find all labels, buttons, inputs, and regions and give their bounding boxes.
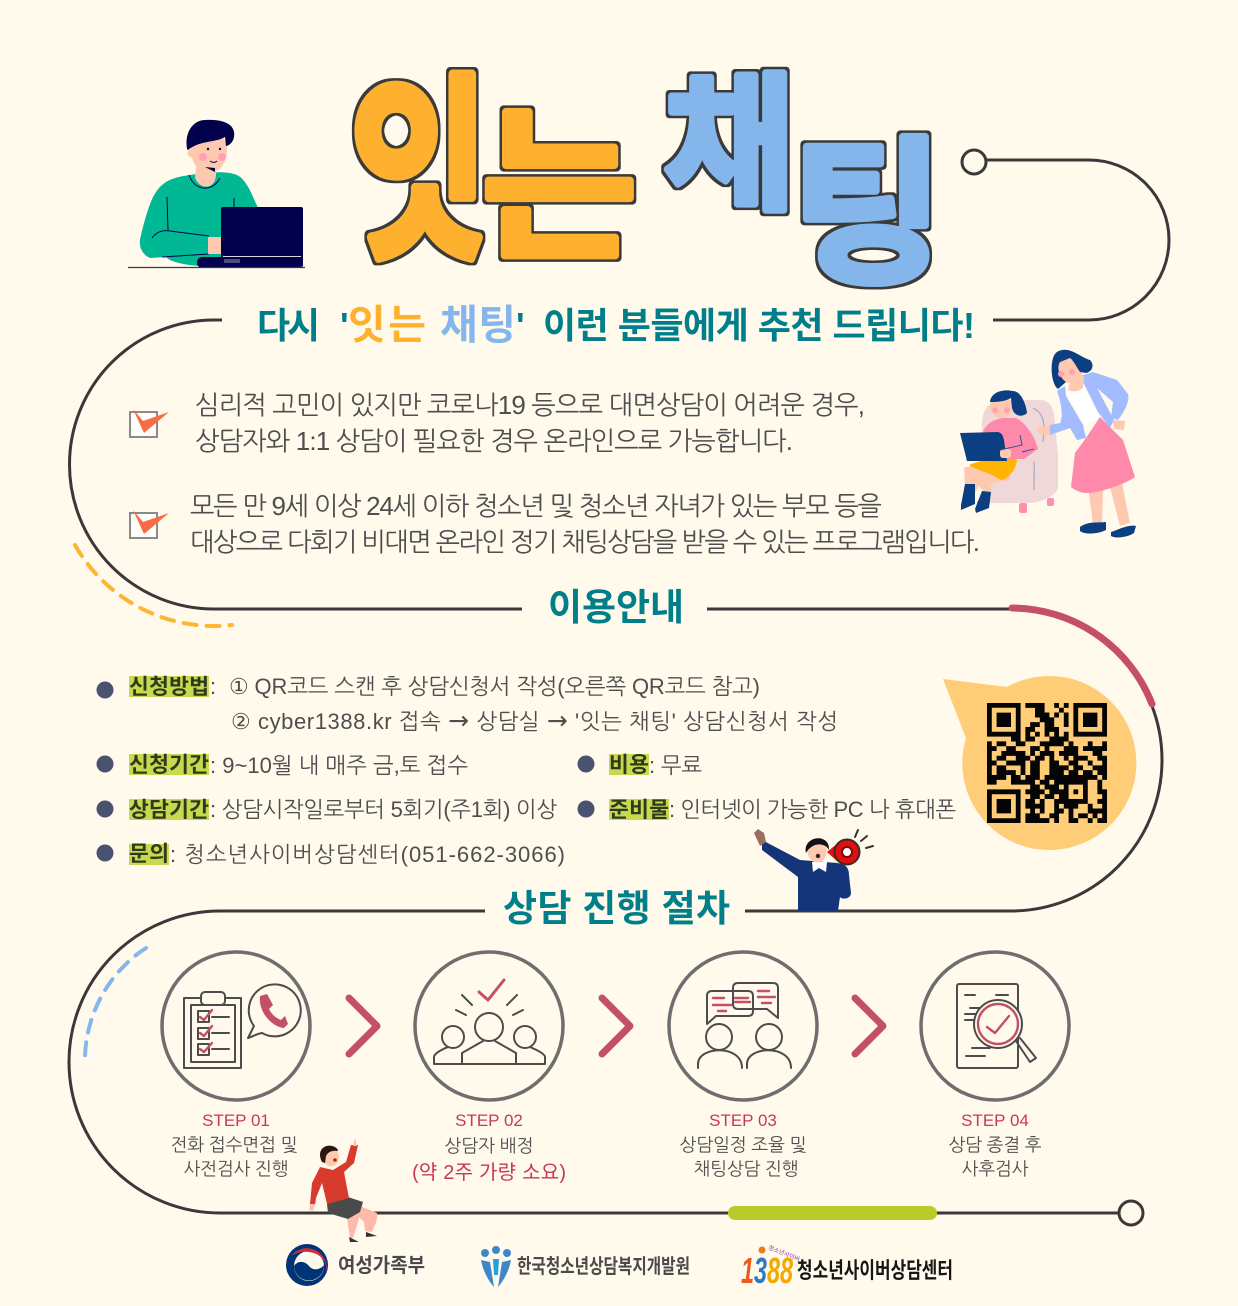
step 4: closing and follow-up [921,952,1069,1100]
step 4 label: 사후검사 [962,1159,1029,1179]
item: application period: : 9~10월 내 매주 금,토 접수 [210,753,468,778]
icon: two people chatting [698,983,791,1068]
title word: 잇는 [350,62,637,284]
title word: 채팅 [664,63,943,303]
heading: recommendation: 다시 [257,305,320,346]
step 1: phone intake [162,952,310,1100]
procedure steps [162,952,1069,1184]
logos [286,1243,953,1291]
heading: recommendation: 채팅 [440,302,516,348]
item: counselling period: 상담기간 [129,798,209,822]
step 2 label [412,1111,566,1184]
QR code callout [943,676,1136,850]
highlight bars [129,676,669,865]
heading: recommendation: 이런 분들에게 추천 드립니다! [543,305,975,346]
step 1 label: 사전검사 진행 [184,1159,288,1179]
step 4 label [948,1111,1042,1179]
logo: 1388 youth cyber counseling center: 청소년사이버상담센터 [797,1258,953,1283]
heading: recommendation: 잇는 [348,302,426,348]
item: counselling period: : 상담시작일로부터 5회기(주1회) 이상 [210,797,557,822]
item: application method [129,674,838,735]
connector path: procedure left curve and end node [69,911,1143,1225]
logo: korea youth counseling institute: 한국청소년상담복지개발원 [517,1255,690,1278]
logo: 1388 youth cyber counseling center [741,1243,953,1291]
step 4 label: 상담 종결 후 [948,1135,1042,1155]
step 3 label: 상담일정 조율 및 [680,1135,806,1155]
item: preparation: 준비물 [609,798,669,822]
text: first recommendation: 심리적 고민이 있지만 코로나19 등으로 대면상담이 어려운 경우, [195,390,865,420]
item: preparation: : 인터넷이 가능한 PC 나 휴대폰 [669,797,956,822]
logo: korea youth counseling institute [481,1246,690,1287]
step 3 label [680,1111,806,1179]
item: contact: : 청소년사이버상담센터(051-662-3066) [170,842,565,867]
logo: 1388 youth cyber counseling center: 청소년사이버 [767,1243,801,1263]
text: second recommendation [190,491,980,557]
icon: document with magnifier [957,984,1036,1068]
usage guide list [96,674,956,867]
step 3: scheduling and chat [669,952,817,1100]
title word: 잇는: 는 [482,97,637,280]
logo: ministry of gender equality [286,1244,425,1286]
item: contact: 문의 [129,842,169,866]
step 2 label: (약 2주 가량 소요) [412,1161,566,1184]
title word: 잇는: 잇 [350,62,489,284]
item: application period: 신청기간 [129,753,209,777]
icon: check box 1 [130,409,169,437]
step arrows [349,998,883,1054]
heading: recommendation: ' [516,305,525,346]
text: second recommendation: 대상으로 다회기 비대면 온라인 정기 채팅상담을 받을 수 있는 프로그램입니다. [190,527,980,557]
illustration: man with megaphone [754,829,873,911]
logo: 1388 youth cyber counseling center: 1388 [741,1250,793,1291]
speech bubble [943,676,1136,850]
title word: 채팅: 채 [664,63,795,229]
icon: group with check [434,980,545,1064]
step 4 label: STEP 04 [961,1111,1029,1130]
illustration: sitting person pointing up [309,1138,377,1242]
heading: recommendation [257,302,975,348]
illustration: man at laptop [128,120,305,268]
connector path: first section left curve [70,320,522,626]
step 1 label: STEP 01 [202,1111,270,1130]
QR code [987,705,1107,821]
icon: clipboard and phone [184,984,301,1068]
step 2 label: 상담자 배정 [444,1136,534,1156]
heading: recommendation: ' [340,305,349,346]
step 1 label [170,1111,298,1179]
text: first recommendation [195,390,865,456]
item: application method: 신청방법 [129,675,209,699]
connector path: title to first section [962,150,1169,320]
item: cost [609,753,702,778]
step 2: counsellor assignment [415,952,563,1100]
step 2 label: STEP 02 [455,1111,523,1130]
checklist: who it is for [130,390,980,557]
step 3 label: 채팅상담 진행 [694,1159,798,1179]
heading: usage guide: 이용안내 [548,587,684,628]
title [350,62,943,303]
item: cost: 비용 [609,753,649,777]
item: cost: : 무료 [649,753,702,778]
item: application method: ② cyber1388.kr 접속 → 상담실 → '잇는 채팅' 상담신청서 작성 [231,706,838,735]
illustration: mother and daughter [960,350,1136,537]
logo: ministry of gender equality: 여성가족부 [338,1254,425,1277]
bullet markers [96,682,594,862]
text: second recommendation: 모든 만 9세 이상 24세 이하 청소년 및 청소년 자녀가 있는 부모 등을 [190,491,882,521]
text: first recommendation: 상담자와 1:1 상담이 필요한 경우 온라인으로 가능합니다. [195,426,793,456]
connector path: usage guide right curve [707,608,1162,911]
step 3 label: STEP 03 [709,1111,777,1130]
item: application method: : [210,674,216,699]
heading: counselling procedure: 상담 진행 절차 [503,888,730,929]
title word: 채팅: 팅 [792,127,943,303]
icon: check box 2 [130,510,169,538]
step 1 label: 전화 접수면접 및 [170,1135,298,1155]
item: application method: ① QR코드 스캔 후 상담신청서 작성(오른쪽 QR코드 참고) [229,674,760,699]
